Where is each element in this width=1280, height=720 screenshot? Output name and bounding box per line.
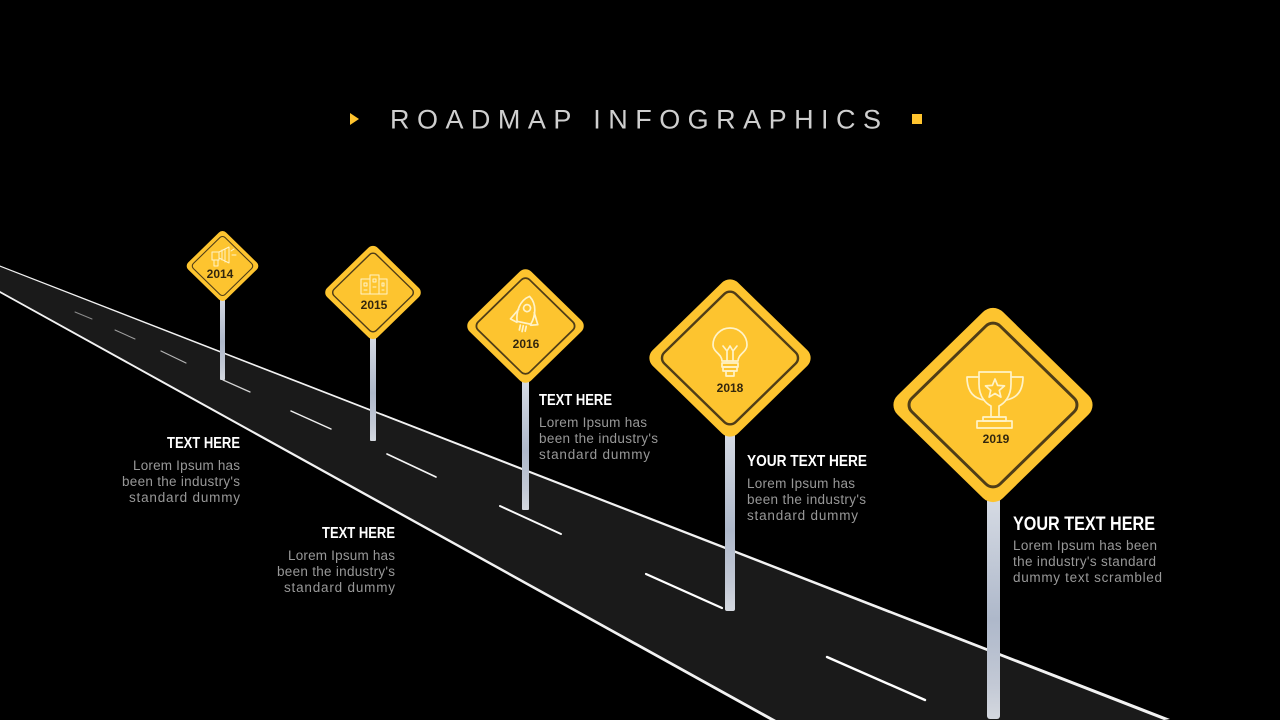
description xyxy=(122,458,240,505)
heading: YOUR TEXT HERE xyxy=(747,453,867,470)
sign post: 2016 xyxy=(464,266,587,510)
description: standard dummy xyxy=(129,490,240,505)
description xyxy=(277,548,395,595)
diamond sign xyxy=(888,302,1098,508)
sign post: 2014 xyxy=(185,229,260,380)
description: been the industry's xyxy=(747,492,866,507)
diamond sign xyxy=(185,229,260,303)
description: Lorem Ipsum has xyxy=(747,476,855,491)
description: standard dummy xyxy=(284,580,395,595)
description xyxy=(539,415,658,462)
text block: 2019 xyxy=(1013,514,1162,585)
description: Lorem Ipsum has been xyxy=(1013,538,1157,553)
icon: buildings xyxy=(361,275,387,294)
pole xyxy=(725,432,735,611)
sign post: 2018 xyxy=(645,275,815,611)
description xyxy=(1013,538,1162,585)
pole xyxy=(522,380,529,510)
road xyxy=(0,266,1170,720)
description: standard dummy xyxy=(539,447,650,462)
text block: 2015 xyxy=(277,525,395,595)
text block: 2018 xyxy=(747,453,867,523)
diamond sign xyxy=(322,243,424,342)
heading: TEXT HERE xyxy=(167,435,240,452)
title marker: triangle xyxy=(350,113,359,125)
heading: TEXT HERE xyxy=(322,525,395,542)
icon: rocket xyxy=(508,293,543,334)
description: been the industry's xyxy=(122,474,240,489)
year label: 2015 xyxy=(361,298,388,312)
icon: megaphone xyxy=(212,247,236,266)
description: been the industry's xyxy=(539,431,658,446)
diamond sign xyxy=(464,266,587,386)
title xyxy=(350,104,922,134)
description: the industry's standard xyxy=(1013,554,1156,569)
road surface xyxy=(0,266,1168,720)
heading: TEXT HERE xyxy=(539,392,612,409)
year label: 2019 xyxy=(983,432,1010,446)
text block: 2016 xyxy=(539,392,658,462)
diamond sign xyxy=(645,275,815,441)
text block: 2014 xyxy=(122,435,240,505)
title marker: square xyxy=(912,114,922,124)
description: dummy text scrambled xyxy=(1013,570,1162,585)
pole xyxy=(220,295,225,380)
year label: 2016 xyxy=(513,337,540,351)
road bottom edge line xyxy=(0,291,776,720)
pole xyxy=(987,498,1000,719)
description: standard dummy xyxy=(747,508,858,523)
heading: YOUR TEXT HERE xyxy=(1013,514,1155,535)
title text: ROADMAP INFOGRAPHICS xyxy=(390,104,881,134)
description xyxy=(747,476,866,523)
description: Lorem Ipsum has xyxy=(539,415,647,430)
pole xyxy=(370,335,376,441)
icon: light bulb xyxy=(713,328,747,376)
year label: 2018 xyxy=(717,381,744,395)
lane dashes xyxy=(75,312,925,700)
sign post: 2019 xyxy=(888,302,1098,719)
description: Lorem Ipsum has xyxy=(133,458,240,473)
description: been the industry's xyxy=(277,564,395,579)
description: Lorem Ipsum has xyxy=(288,548,395,563)
year label: 2014 xyxy=(207,267,234,281)
sign post: 2015 xyxy=(322,243,424,441)
icon: trophy xyxy=(967,372,1023,428)
road top edge line xyxy=(0,266,1170,720)
